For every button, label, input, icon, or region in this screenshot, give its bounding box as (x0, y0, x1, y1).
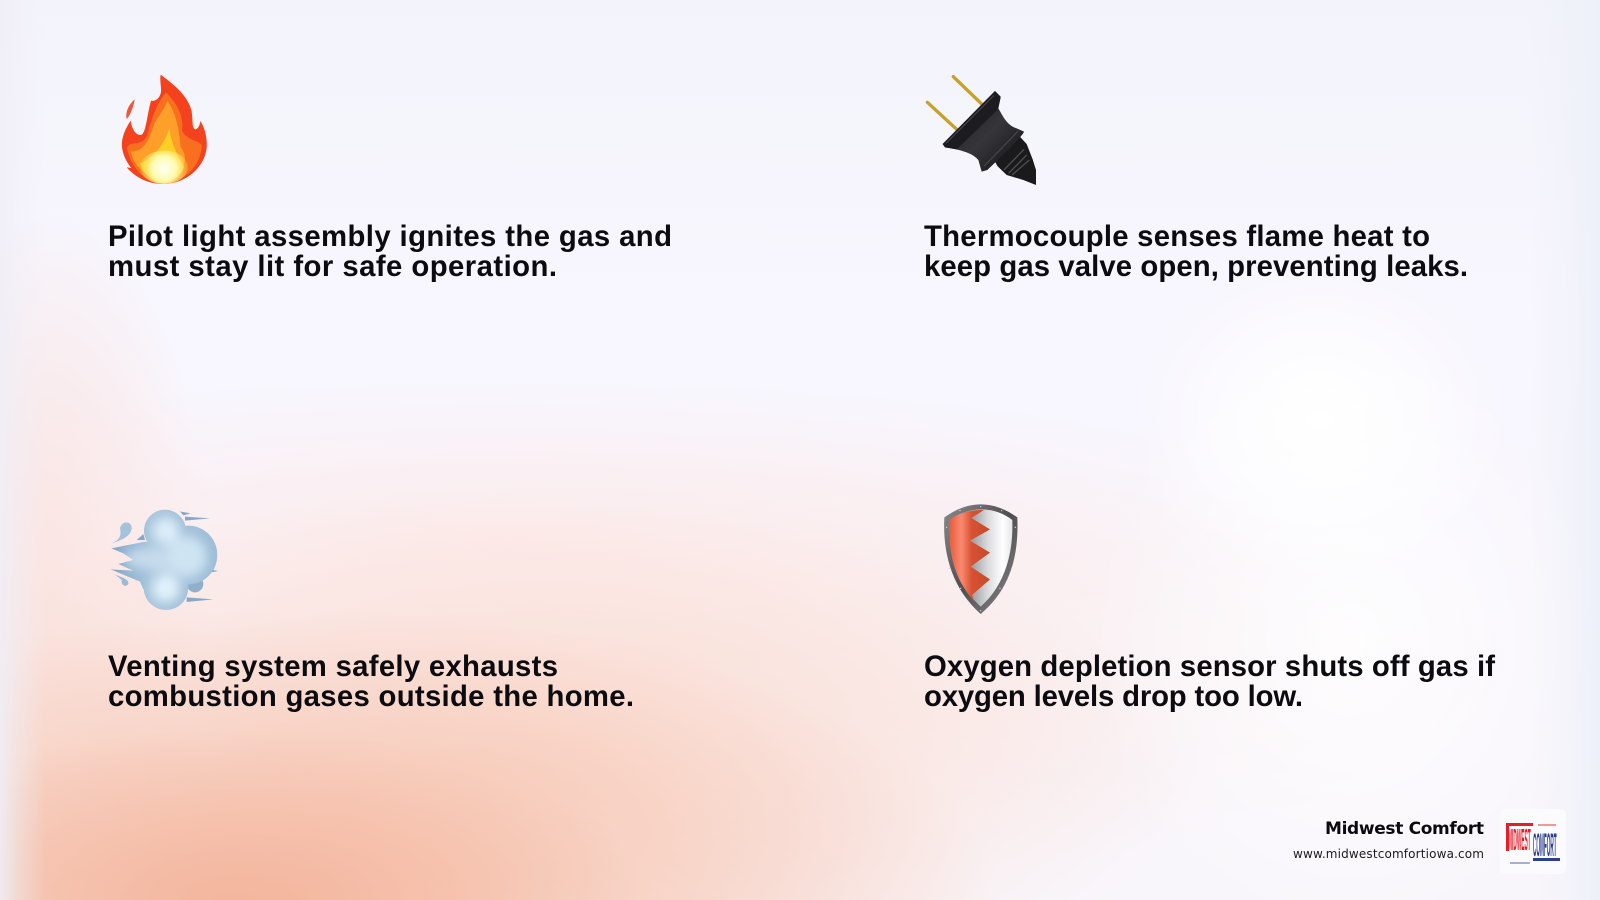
text: pilot light: Pilot light assembly ignites the gas and (108, 220, 672, 253)
logo badge: MIDWEST (1508, 822, 1531, 857)
text: thermocouple (924, 220, 1468, 283)
text: venting system: combustion gases outside the home. (108, 680, 634, 713)
text: oxygen sensor (924, 650, 1496, 713)
text: thermocouple: keep gas valve open, preventing leaks. (924, 250, 1468, 283)
logo badge (1506, 822, 1560, 864)
text: venting system: Venting system safely exhausts (108, 650, 558, 683)
text: venting system (108, 650, 634, 713)
footer brand text: www.midwestcomfortiowa.com (1293, 847, 1484, 861)
footer brand text: Midwest Comfort (1325, 819, 1484, 839)
text: pilot light: must stay lit for safe operation. (108, 250, 557, 283)
text: thermocouple: Thermocouple senses flame heat to (924, 220, 1430, 253)
rivets (946, 506, 1016, 611)
text: oxygen sensor: oxygen levels drop too low. (924, 680, 1303, 713)
icon: fire (122, 74, 207, 184)
text: oxygen sensor: Oxygen depletion sensor shuts off gas if (924, 650, 1495, 683)
icon: wind cloud (111, 510, 218, 610)
icon: shield (944, 504, 1018, 614)
footer brand text (1293, 819, 1484, 861)
icon: electric plug (926, 74, 1036, 185)
logo badge: COMFORT (1533, 827, 1557, 863)
plug pins (927, 77, 982, 129)
text: pilot light (108, 220, 672, 283)
